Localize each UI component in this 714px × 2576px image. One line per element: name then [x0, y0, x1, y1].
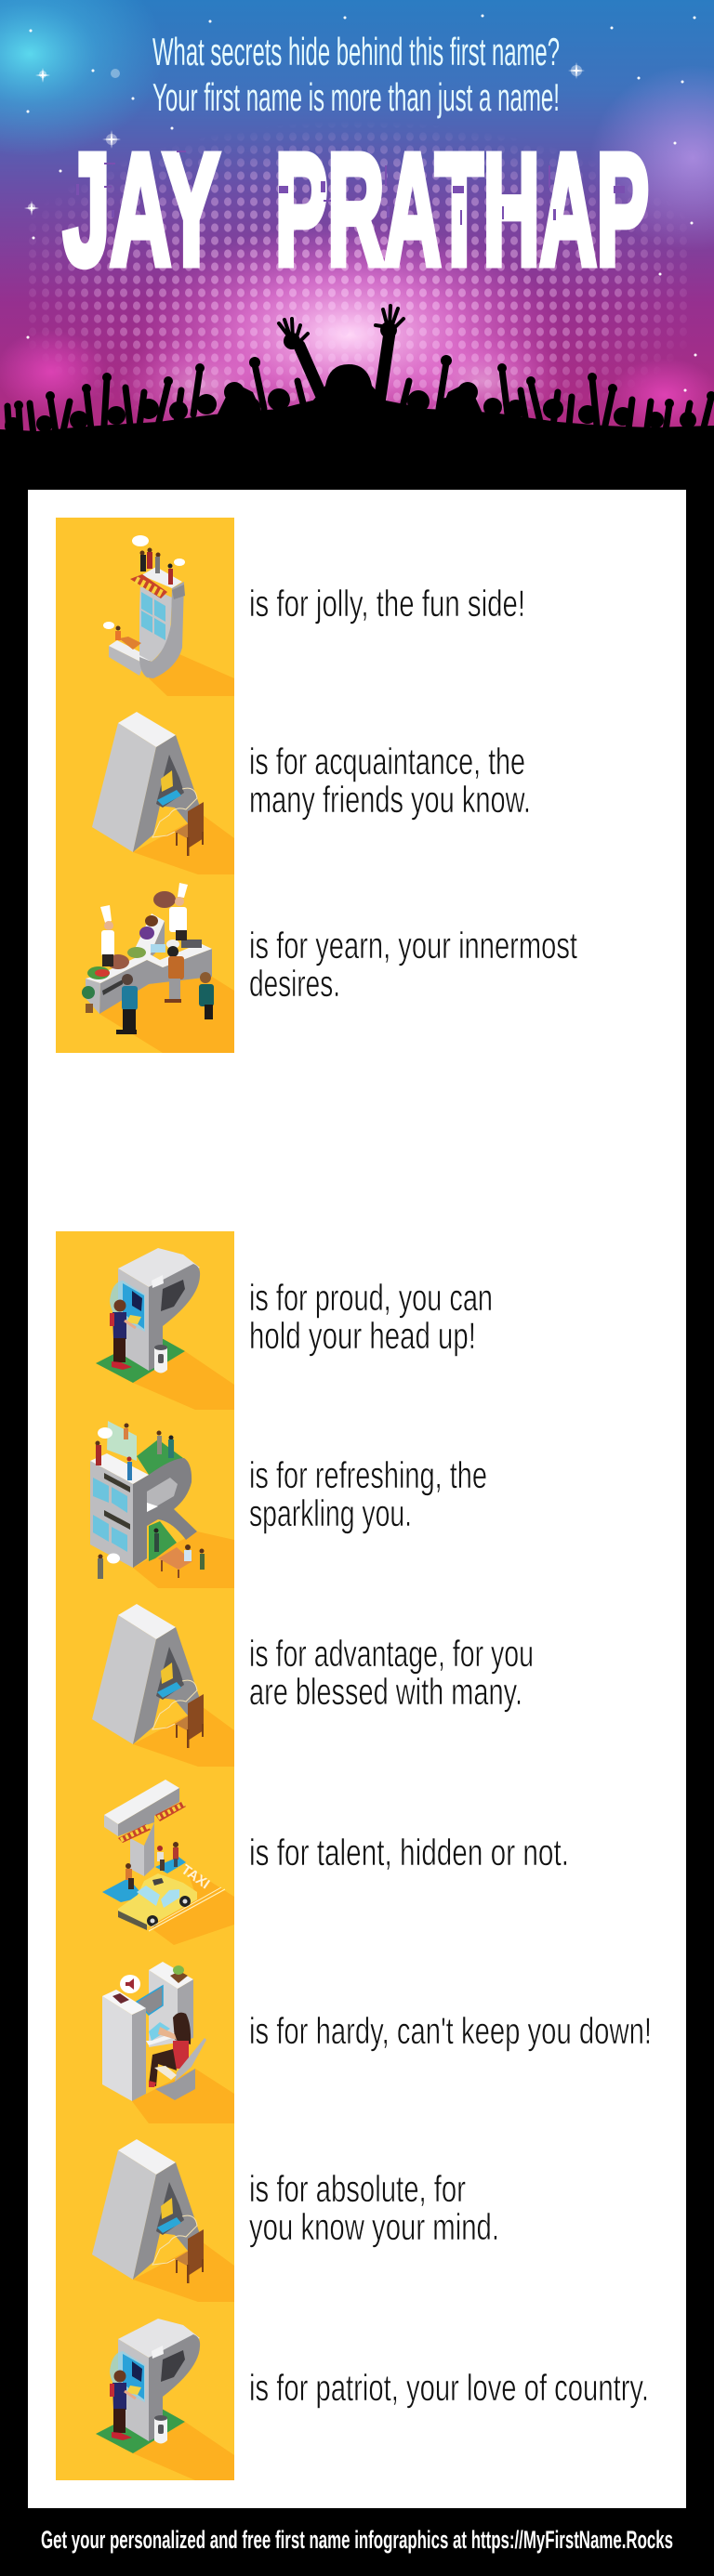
- letter tile: Y: [56, 874, 234, 1053]
- crowd silhouette: [0, 306, 714, 502]
- letter tile: H: [56, 1945, 234, 2123]
- text: A line: is for absolute, for: [249, 2169, 466, 2210]
- taxi car: [118, 1873, 225, 1931]
- title: JAY PRATHAP: [63, 122, 649, 298]
- text: P line: [249, 1278, 493, 1357]
- letter J block: [109, 567, 185, 678]
- text: R line: sparkling you.: [249, 1493, 412, 1534]
- title: JAY PRATHAP: JAY: [63, 122, 219, 298]
- letter tile: A: [56, 1588, 234, 1767]
- text: A line: are blessed with many.: [249, 1672, 522, 1713]
- letter H pillars: [102, 1962, 193, 2101]
- text: J line: is for jolly, the fun side!: [249, 584, 525, 624]
- text: A line: many friends you know.: [249, 780, 531, 821]
- text: R line: is for refreshing, the: [249, 1455, 487, 1496]
- plant: [170, 1965, 188, 1983]
- text: A line: is for acquaintance, the: [249, 742, 525, 782]
- people and desk: [95, 1424, 205, 1579]
- text: T line: is for talent, hidden or not.: [249, 1833, 569, 1873]
- letter tile: P: [56, 2302, 234, 2480]
- letter tile: J: [56, 518, 234, 696]
- letter Y buffet counter: [86, 913, 212, 1014]
- letter tile: A: [56, 696, 234, 874]
- taxi lettering: TAXI: [178, 1861, 213, 1892]
- text: Y line: is for yearn, your innermost: [249, 926, 577, 966]
- text: P line: is for proud, you can: [249, 1278, 493, 1319]
- letter R building: [90, 1421, 197, 1568]
- woman at computer: [149, 2013, 191, 2087]
- text: A line: [249, 1634, 534, 1713]
- chefs and guests: [82, 883, 214, 1034]
- text: A line: is for advantage, for you: [249, 1634, 534, 1675]
- chair: [154, 2038, 206, 2100]
- passengers: [126, 1842, 178, 1889]
- people on roof and desk: [103, 535, 185, 650]
- tagline: [152, 30, 560, 119]
- text: R line: [249, 1455, 487, 1534]
- letter tile: T: [56, 1767, 234, 1945]
- letter T block: [102, 1780, 186, 1902]
- speaker bubble: [120, 1975, 140, 1993]
- letter tile: P: [56, 1231, 234, 1410]
- letter tile: R: [56, 1410, 234, 1588]
- awnings: [118, 1802, 186, 1843]
- header concert background: [0, 0, 714, 446]
- awning: [130, 574, 167, 598]
- letter tile: A: [56, 2123, 234, 2302]
- text: P line: hold your head up!: [249, 1316, 476, 1357]
- text: Y line: [249, 926, 577, 1005]
- text: A line: you know your mind.: [249, 2207, 499, 2248]
- white content panel: [28, 490, 686, 2508]
- text: Y line: desires.: [249, 964, 340, 1005]
- food: [87, 891, 202, 979]
- text: A line: [249, 742, 531, 821]
- text: A line: [249, 2169, 499, 2248]
